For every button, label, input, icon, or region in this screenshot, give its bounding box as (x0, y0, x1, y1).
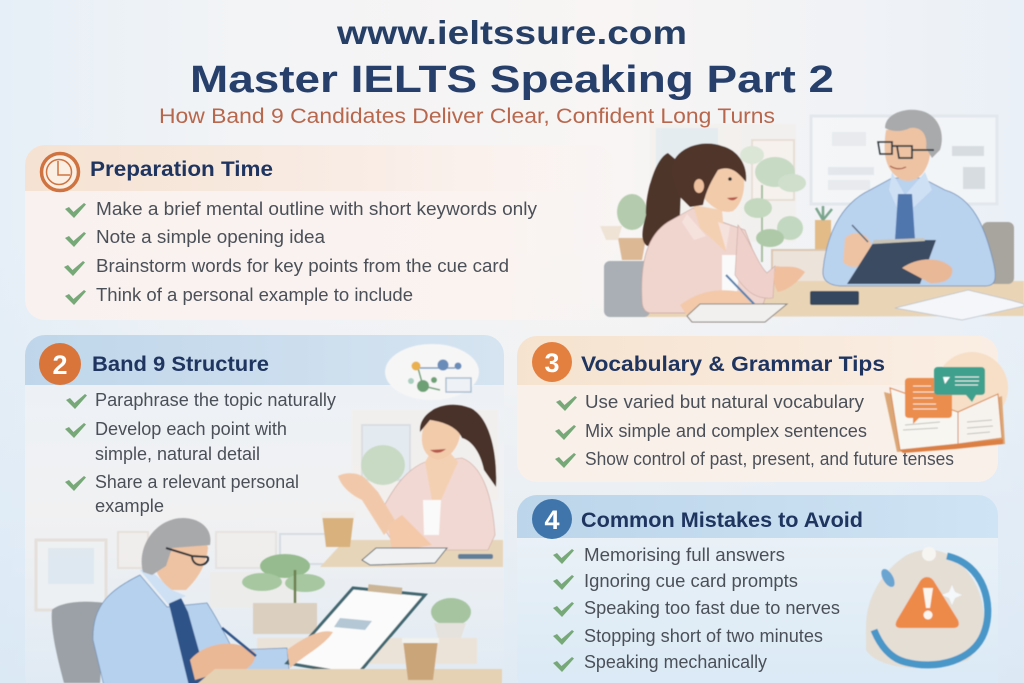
table (190, 669, 502, 683)
checklist: Mix simple and complex sentences (585, 420, 867, 441)
heading: Vocabulary & Grammar Tips (581, 353, 885, 376)
checklist (553, 544, 840, 672)
icon: clock (42, 154, 78, 190)
checklist: Use varied but natural vocabulary (585, 391, 865, 412)
device (810, 291, 859, 305)
number badge: 4 (544, 505, 560, 535)
checklist: simple, natural detail (95, 443, 260, 464)
checklist: Think of a personal example to include (96, 284, 413, 305)
checklist: Ignoring cue card prompts (584, 570, 798, 591)
table (612, 281, 1024, 317)
checklist: Speaking too fast due to nerves (584, 597, 840, 618)
checklist (65, 389, 337, 516)
woman (338, 405, 496, 552)
main title: Master IELTS Speaking Part 2 (190, 59, 834, 101)
number badge (532, 342, 572, 382)
number badge: 2 (52, 350, 68, 380)
coffee cup (403, 640, 438, 680)
checklist: Develop each point with (95, 418, 287, 439)
checklist: Share a relevant personal (95, 471, 299, 492)
plants (600, 146, 832, 282)
desk (320, 540, 503, 567)
panel: preparation time (25, 145, 537, 320)
checklist (64, 198, 538, 305)
number badge (532, 499, 572, 539)
checklist: Speaking mechanically (584, 651, 768, 672)
checklist: Show control of past, present, and future tenses (585, 448, 954, 469)
title block (159, 14, 834, 128)
checklist: example (95, 495, 164, 516)
heading: Band 9 Structure (92, 353, 269, 376)
checklist: Make a brief mental outline with short keywords only (96, 198, 538, 219)
checklist: Stopping short of two minutes (584, 625, 823, 646)
website url: www.ieltssure.com (336, 14, 687, 51)
plant (242, 554, 325, 634)
office backdrop (650, 116, 997, 242)
chairs (604, 261, 650, 317)
heading: Preparation Time (90, 158, 273, 181)
icon: warning triangle with arc (866, 547, 988, 668)
number badge (39, 343, 81, 385)
notepad (687, 304, 787, 322)
number badge: 3 (544, 348, 560, 378)
window and wall (36, 410, 498, 610)
panel: common mistakes to avoid (517, 495, 998, 683)
checklist: Memorising full answers (584, 544, 785, 565)
subtitle: How Band 9 Candidates Deliver Clear, Confident Long Turns (159, 105, 775, 128)
panel: band 9 structure (25, 335, 504, 683)
coffee cup (322, 514, 354, 547)
man (93, 518, 425, 683)
candidate (642, 144, 805, 314)
examiner (823, 110, 995, 286)
tablet (362, 548, 447, 565)
thought bubble (385, 344, 479, 400)
heading: Common Mistakes to Avoid (581, 509, 863, 532)
checklist: Note a simple opening idea (96, 226, 326, 247)
illustration: candidate and examiner at desk (600, 110, 1024, 322)
checklist (555, 391, 954, 469)
icon: open book with speech bubbles (884, 352, 1008, 453)
checklist: Paraphrase the topic naturally (95, 389, 337, 410)
panel: vocabulary and grammar tips (517, 336, 1008, 482)
illustration: candidate and examiner (36, 405, 503, 683)
papers (895, 290, 1024, 320)
checklist: Brainstorm words for key points from the cue card (96, 255, 509, 276)
chair (52, 602, 105, 683)
